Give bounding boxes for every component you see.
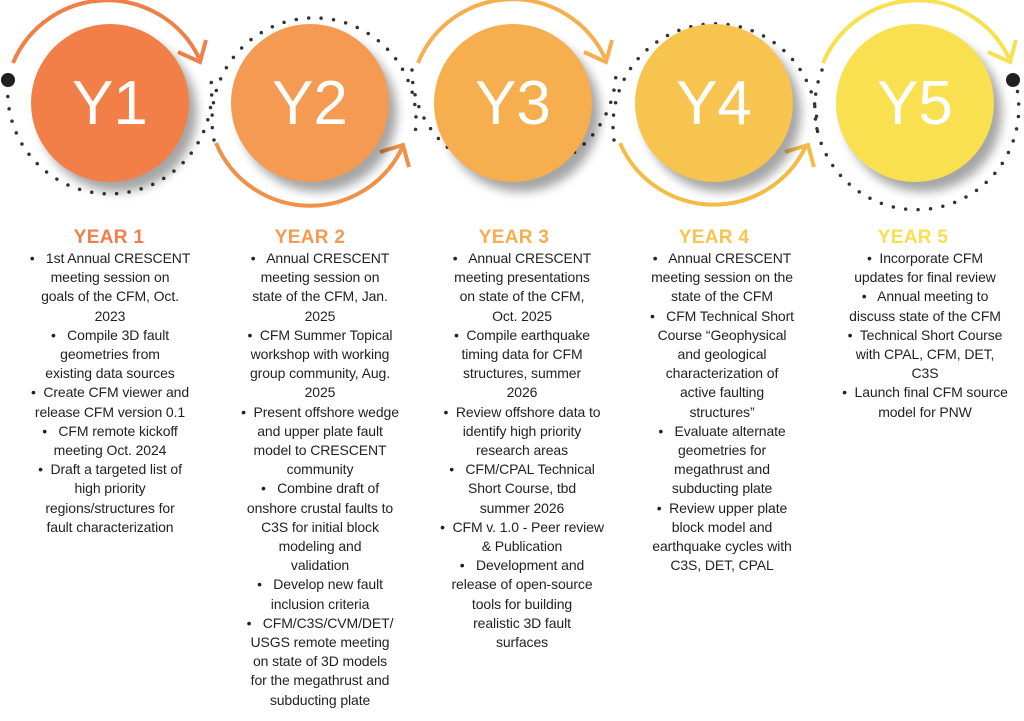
text year 2: USGS remote meeting (251, 634, 389, 650)
text year 3: • Review offshore data to (444, 404, 600, 420)
text year 4 (650, 250, 794, 573)
text year 2: 2025 (305, 308, 335, 324)
text year 3 (440, 250, 604, 650)
text year 4: earthquake cycles with (652, 538, 792, 554)
panel: year 1 (30, 227, 190, 535)
graphic: year circles and arrows (1, 0, 1020, 212)
text year 2: subducting plate (270, 692, 370, 708)
text year 4: Course “Geophysical (658, 327, 786, 343)
text year 5: updates for final review (854, 269, 996, 285)
circle Y3: Y3 (475, 69, 551, 138)
text year 1: release CFM version 0.1 (35, 404, 185, 420)
text year 2: • CFM/C3S/CVM/DET/ (247, 615, 393, 631)
text year 2: 2025 (305, 384, 335, 400)
panel: year 2 (241, 227, 399, 708)
text year 1 (30, 250, 190, 535)
circle Y5 (836, 24, 1002, 192)
circle Y1: Y1 (72, 69, 148, 138)
text year 4: • CFM Technical Short (650, 308, 794, 324)
text year 4: active faulting (680, 384, 764, 400)
text year 3: release of open-source (452, 576, 592, 592)
text year 1: regions/structures for (45, 500, 175, 516)
text year 2: for the megathrust and (251, 672, 389, 688)
text year 4: • Review upper plate (657, 500, 787, 516)
text year 1: 2023 (95, 308, 125, 324)
text year 5: model for PNW (878, 404, 972, 420)
text year 2: on state of 3D models (253, 653, 387, 669)
panel: year 5 (842, 227, 1008, 420)
text year 4: • Evaluate alternate (658, 423, 786, 439)
text year 2: • Combine draft of (261, 480, 379, 496)
text year 2: meeting session on (261, 269, 379, 285)
text year 3: timing data for CFM (461, 346, 583, 362)
arrow Y4 (620, 143, 814, 205)
text year 1: • Draft a targeted list of (38, 461, 182, 477)
text year 1: meeting Oct. 2024 (54, 442, 166, 458)
text year 1: goals of the CFM, Oct. (41, 288, 179, 304)
text year 2: validation (291, 557, 349, 573)
circle Y2: Y2 (272, 69, 348, 138)
heading year 5: YEAR 5 (878, 227, 948, 248)
arrow Y2 (216, 143, 409, 206)
text year 1: meeting session on (51, 269, 169, 285)
text year 3: • Compile earthquake (454, 327, 590, 343)
text year 5: • Incorporate CFM (867, 250, 983, 266)
text year 4: • Annual CRESCENT (653, 250, 791, 266)
heading year 1: YEAR 1 (74, 227, 144, 248)
heading year 2: YEAR 2 (275, 227, 345, 248)
text year 3: meeting presentations (454, 269, 590, 285)
text year 3: Oct. 2025 (492, 308, 552, 324)
arrow Y3 (418, 0, 612, 63)
arrow Y5 (823, 0, 1016, 63)
text year 3: & Publication (482, 538, 562, 554)
text year 2: group community, Aug. (250, 365, 390, 381)
text year 3: 2026 (507, 384, 537, 400)
end dot (1006, 73, 1020, 87)
text year 5: • Annual meeting to (862, 288, 988, 304)
text year 5: • Launch final CFM source (842, 384, 1008, 400)
dotted ring Y3 (lower) (412, 70, 616, 172)
text year 3: on state of the CFM, (460, 288, 584, 304)
text year 1: • Compile 3D fault (51, 327, 169, 343)
text year 4: block model and (672, 519, 772, 535)
text year 2: inclusion criteria (271, 596, 369, 612)
text year 3: • Annual CRESCENT (453, 250, 591, 266)
text year 3: • CFM/CPAL Technical (449, 461, 595, 477)
text year 1: • 1st Annual CRESCENT (30, 250, 190, 266)
text year 2: and upper plate fault (257, 423, 383, 439)
heading year 3: YEAR 3 (479, 227, 549, 248)
text year 2: state of the CFM, Jan. (252, 288, 388, 304)
text year 3: tools for building (472, 596, 572, 612)
text year 4: state of the CFM (671, 288, 773, 304)
text year 4: geometries for (678, 442, 766, 458)
text year 2: model to CRESCENT (254, 442, 386, 458)
text year 2: modeling and (279, 538, 361, 554)
text year 2: • Develop new fault (257, 576, 383, 592)
text year 2: • CFM Summer Topical (248, 327, 392, 343)
text year 4: megathrust and (674, 461, 770, 477)
dotted ring Y5 (lower) (815, 70, 1019, 210)
text year 5: • Technical Short Course (848, 327, 1002, 343)
panel: year 3 (440, 227, 604, 650)
circle Y1 (31, 24, 197, 192)
text year 1: fault characterization (46, 519, 173, 535)
text year 1: high priority (74, 480, 146, 496)
text year 2: C3S for initial block (261, 519, 379, 535)
circle Y4 (635, 24, 801, 192)
circle Y2 (231, 24, 397, 192)
heading year 4: YEAR 4 (679, 227, 749, 248)
text year 1: • CFM remote kickoff (42, 423, 178, 439)
text year 4: structures” (689, 404, 755, 420)
text year 4: subducting plate (672, 480, 772, 496)
text year 2: workshop with working (251, 346, 389, 362)
dotted ring Y4 (upper) (613, 24, 817, 140)
dotted ring Y1 (lower) (8, 80, 212, 194)
text year 4: meeting session on the (651, 269, 793, 285)
text year 1: • Create CFM viewer and (31, 384, 189, 400)
text year 3: identify high priority (463, 423, 581, 439)
text year 2: • Annual CRESCENT (251, 250, 389, 266)
text year 5: discuss state of the CFM (849, 308, 1001, 324)
text year 3: summer 2026 (480, 500, 564, 516)
text year 2 (241, 250, 399, 708)
dotted ring Y2 (upper) (212, 18, 416, 140)
text year 4: characterization of (666, 365, 778, 381)
arrow Y1 (13, 0, 206, 63)
circle Y4: Y4 (676, 69, 752, 138)
start dot (1, 73, 15, 87)
text year 2: • Present offshore wedge (241, 404, 399, 420)
text year 4: and geological (678, 346, 766, 362)
text year 2: community (287, 461, 353, 477)
text year 5: C3S (912, 365, 938, 381)
text year 4: C3S, DET, CPAL (670, 557, 774, 573)
text year 1: existing data sources (45, 365, 175, 381)
text year 3: • CFM v. 1.0 - Peer review (440, 519, 604, 535)
circle Y5: Y5 (877, 69, 953, 138)
text year 3: • Development and (460, 557, 584, 573)
panel: year 4 (650, 227, 794, 573)
text year 2: onshore crustal faults to (247, 500, 393, 516)
text year 3: research areas (476, 442, 568, 458)
text year 5 (842, 250, 1008, 420)
text year 3: realistic 3D fault (473, 615, 571, 631)
text year 5: with CPAL, CFM, DET, (856, 346, 994, 362)
text year 3: Short Course, tbd (468, 480, 576, 496)
text year 3: surfaces (496, 634, 548, 650)
text year 3: structures, summer (463, 365, 581, 381)
circle Y3 (434, 24, 600, 192)
text year 1: geometries from (60, 346, 160, 362)
